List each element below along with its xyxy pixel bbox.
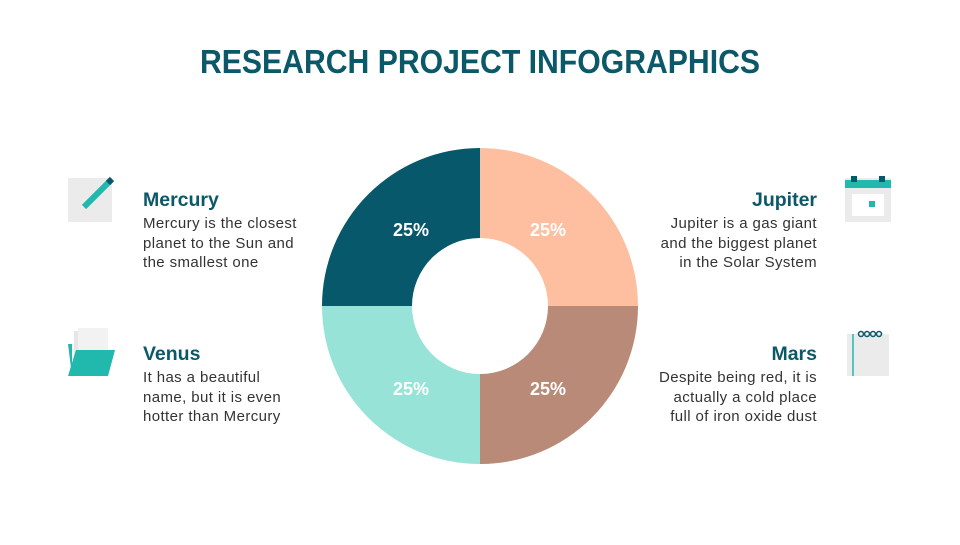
text: Venus bbox=[143, 343, 281, 425]
text: Jupiter bbox=[661, 189, 817, 271]
text: Mars: Mars bbox=[771, 343, 817, 365]
donut chart: 25% bbox=[393, 379, 429, 399]
text: Jupiter: Jupiter bbox=[752, 189, 817, 211]
icon: folder bbox=[68, 328, 115, 376]
donut chart bbox=[322, 148, 638, 464]
text: Mercury: Mercury bbox=[143, 189, 219, 211]
text: Venus: name, but it is even bbox=[143, 389, 281, 406]
text: Mercury: Mercury is the closest bbox=[143, 215, 297, 232]
text: Mars: full of iron oxide dust bbox=[670, 408, 817, 425]
text: Mars: actually a cold place bbox=[674, 389, 817, 406]
icon: notepad bbox=[847, 332, 889, 376]
text: Mercury: the smallest one bbox=[143, 254, 259, 271]
text: Mercury bbox=[143, 189, 297, 271]
text: Jupiter: in the Solar System bbox=[679, 254, 817, 271]
text: Mercury: planet to the Sun and bbox=[143, 235, 294, 252]
text: Mars bbox=[659, 343, 817, 425]
text: Venus: It has a beautiful bbox=[143, 369, 260, 386]
donut chart: 25% bbox=[530, 379, 566, 399]
text: Jupiter: and the biggest planet bbox=[661, 235, 817, 252]
text: Jupiter: Jupiter is a gas giant bbox=[671, 215, 817, 232]
icon: calendar bbox=[845, 176, 891, 222]
donut chart: 25% bbox=[530, 220, 566, 240]
text: Venus: Venus bbox=[143, 343, 201, 365]
text: Mars: Despite being red, it is bbox=[659, 369, 817, 386]
icon: pencil bbox=[68, 178, 112, 222]
title: RESEARCH PROJECT INFOGRAPHICS bbox=[200, 43, 760, 80]
donut chart: 25% bbox=[393, 220, 429, 240]
text: Venus: hotter than Mercury bbox=[143, 408, 281, 425]
